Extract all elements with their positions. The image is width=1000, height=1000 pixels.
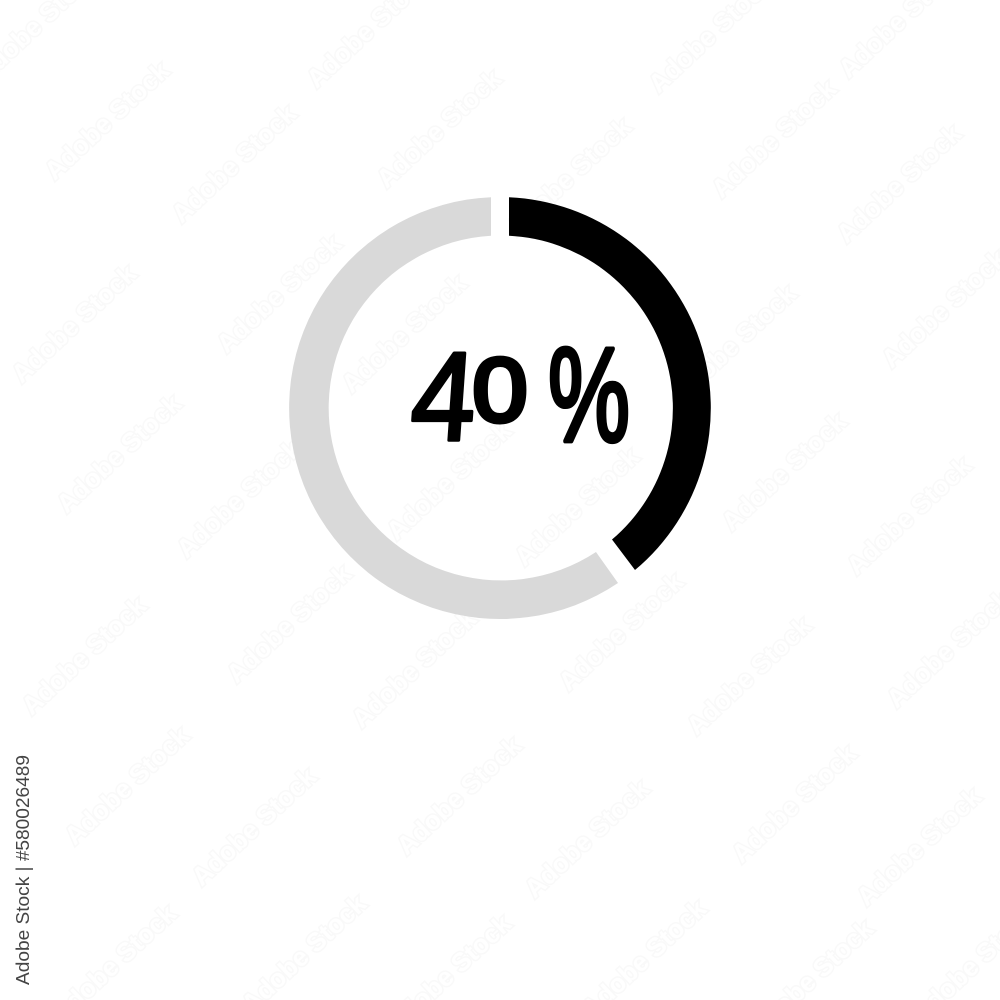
- percentage label: 4: [407, 326, 481, 467]
- watermark pattern: Adobe Stock: [50, 388, 187, 519]
- watermark pattern: Adobe Stock: [680, 610, 817, 741]
- watermark pattern: Adobe Stock: [552, 566, 689, 697]
- watermark pattern: Adobe Stock: [165, 98, 302, 229]
- watermark pattern: Adobe Stock: [850, 781, 987, 912]
- watermark pattern: Adobe Stock: [725, 738, 862, 869]
- watermark pattern: Adobe Stock: [185, 761, 322, 892]
- percentage label: 0: [472, 340, 528, 441]
- watermark pattern: Adobe Stock: [38, 55, 175, 186]
- watermark pattern: Adobe Stock: [345, 603, 482, 734]
- stock id caption: Adobe Stock | #580026489: [13, 755, 33, 985]
- watermark pattern: Adobe Stock: [705, 73, 842, 204]
- watermark pattern: Adobe Stock: [500, 111, 637, 242]
- watermark pattern: Adobe Stock: [380, 415, 517, 546]
- ring segment: filled 40 percent (black): [509, 197, 711, 570]
- percentage label: %: [548, 321, 630, 470]
- watermark pattern: Adobe Stock: [5, 258, 142, 389]
- watermark pattern: Adobe Stock: [58, 720, 195, 851]
- watermark pattern: Adobe Stock: [518, 773, 655, 904]
- percentage label: [407, 321, 630, 470]
- watermark pattern: Adobe Stock: [830, 118, 967, 249]
- watermark pattern: Adobe Stock: [840, 450, 977, 581]
- watermark pattern: Adobe Stock: [15, 590, 152, 721]
- donut chart: 40 percent: [289, 197, 711, 619]
- watermark pattern: Adobe Stock: [335, 268, 472, 399]
- ring segment: remaining 60 percent (gray): [289, 197, 618, 619]
- watermark pattern: Adobe Stock: [370, 63, 507, 194]
- watermark pattern: Adobe Stock: [715, 406, 852, 537]
- watermark pattern: Adobe Stock: [220, 558, 357, 689]
- watermark pattern: Adobe Stock: [210, 228, 347, 359]
- watermark pattern: Adobe Stock: [390, 730, 527, 861]
- watermark pattern: Adobe Stock: [508, 441, 645, 572]
- watermark pattern: Adobe Stock: [665, 278, 802, 409]
- watermark pattern: Adobe Stock: [170, 433, 307, 564]
